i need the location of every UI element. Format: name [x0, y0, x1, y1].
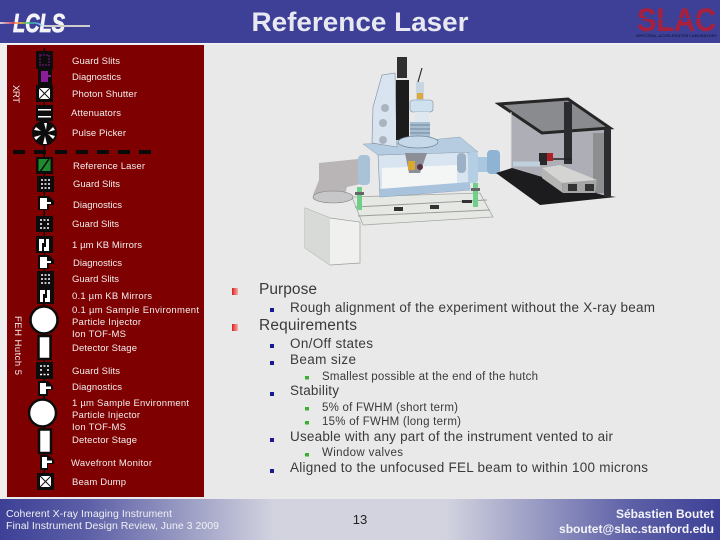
icon: beam dump — [37, 473, 54, 490]
base block — [305, 208, 360, 265]
beamline labels: Photon Shutter — [72, 89, 137, 100]
elbow pipe — [313, 155, 370, 203]
bullet list — [232, 281, 655, 475]
icon: wavefront monitor — [40, 455, 54, 470]
icon: guard slits — [36, 216, 53, 232]
curved support plate — [372, 73, 397, 147]
beamline labels: Guard Slits — [72, 56, 120, 67]
bullet: Requirements — [232, 324, 238, 331]
text: rough alignment: Rough alignment of the experiment without the X-ray beam — [290, 300, 655, 315]
text: beam size: Beam size — [290, 352, 356, 367]
text: Purpose: Purpose — [259, 281, 317, 298]
icon: attenuators — [36, 105, 53, 121]
beamline labels: 0.1 µm KB Mirrors — [72, 291, 152, 302]
beamline labels: Particle Injector — [72, 410, 140, 421]
right flange — [468, 150, 500, 183]
beamline labels: Particle Injector — [72, 317, 141, 328]
beamline labels: Attenuators — [71, 108, 121, 119]
beamline labels: Diagnostics — [72, 72, 121, 83]
laser box — [513, 153, 597, 193]
icon: KB mirrors — [37, 287, 54, 304]
enclosure floor — [496, 168, 616, 205]
chamber body — [363, 137, 478, 197]
title: Reference Laser — [252, 7, 469, 37]
beamline labels: Ion TOF-MS — [72, 422, 126, 433]
footer right text: Sébastien Boutet — [616, 507, 714, 521]
icon: detector stage — [39, 430, 51, 453]
bullet — [270, 392, 274, 396]
logo: LCLS: LCLS — [13, 8, 65, 38]
beamline labels: 1 µm KB Mirrors — [72, 240, 142, 251]
text: aligned: Aligned to the unfocused FEL beam to within 100 microns — [290, 460, 648, 475]
bullet — [270, 361, 274, 365]
footer left text: Coherent X-ray Imaging Instrument — [6, 508, 172, 520]
text: stability: Stability — [290, 383, 339, 398]
icon: sample environment — [29, 400, 56, 426]
enclosure — [499, 99, 610, 195]
enclosure front pillar — [604, 128, 611, 197]
icon: diagnostics — [38, 381, 53, 396]
icon: diagnostics — [38, 255, 54, 269]
icon: guard slits — [37, 176, 54, 192]
XRT label: XRT — [10, 85, 21, 103]
text: useable: Useable with any part of the instrument vented to air — [290, 429, 614, 444]
beamline labels: Beam Dump — [72, 477, 126, 488]
bullet — [305, 421, 309, 424]
beamline labels: Pulse Picker — [72, 128, 126, 139]
beamline labels: Detector Stage — [72, 435, 137, 446]
beamline labels: 0.1 µm Sample Environment — [72, 305, 199, 316]
rails — [352, 193, 493, 225]
icon: guard slits purple — [36, 51, 53, 69]
bullet — [305, 453, 309, 456]
beamline labels: Guard Slits — [72, 366, 120, 377]
XRT divider — [13, 150, 152, 154]
icon: detector stage — [38, 336, 50, 359]
bullet: Purpose — [232, 288, 238, 295]
beamline labels: Diagnostics — [73, 258, 122, 269]
beamline labels: Reference Laser — [73, 161, 145, 172]
beamline labels: Detector Stage — [72, 343, 137, 354]
beamline labels: Ion TOF-MS — [72, 329, 126, 340]
icon: KB mirrors — [36, 236, 53, 253]
icon: reference laser — [36, 157, 53, 174]
bullet — [270, 438, 274, 442]
logo: SLAC: SPECTRAL ACCELERATOR LABORATORY — [636, 33, 717, 38]
beamline labels: Guard Slits — [73, 179, 120, 190]
beamline labels — [71, 56, 199, 488]
vertical camera — [396, 57, 409, 140]
icon: pulse picker — [32, 120, 57, 146]
icon: photon shutter — [36, 85, 53, 102]
instrument illustration — [305, 57, 616, 265]
beamline labels: Diagnostics — [72, 382, 122, 393]
bullet — [270, 308, 274, 312]
bellows and sensor — [398, 68, 438, 148]
footer right text: sboutet@slac.stanford.edu — [559, 522, 714, 536]
icon: guard slits — [36, 362, 53, 379]
footer left text: Final Instrument Design Review, June 3 2009 — [6, 520, 219, 532]
header bar — [0, 0, 720, 44]
text: on/off states: On/Off states — [290, 336, 373, 351]
footer — [0, 499, 720, 540]
beamline labels: Guard Slits — [72, 219, 119, 230]
icon: diagnostics — [38, 196, 54, 210]
beamline labels: Wavefront Monitor — [71, 458, 152, 469]
beamline axis — [44, 48, 45, 488]
beamline labels: Guard Slits — [72, 274, 119, 285]
text: window valves: Window valves — [322, 447, 403, 459]
text: 15% of FWHM: 15% of FWHM (long term) — [322, 416, 461, 428]
bullet — [270, 469, 274, 473]
text: Requirements: Requirements — [259, 317, 357, 334]
FEH Hutch 5 label: FEH Hutch 5 — [12, 316, 23, 375]
panel: beamline — [0, 45, 204, 500]
footer left text — [6, 508, 219, 532]
bullet — [270, 344, 274, 348]
beamline labels: 1 µm Sample Environment — [72, 398, 189, 409]
text: 5% of FWHM: 5% of FWHM (short term) — [322, 402, 458, 414]
footer right text — [559, 507, 714, 536]
icon: diagnostics purple — [38, 69, 52, 85]
bullet — [305, 407, 309, 410]
bullet — [305, 376, 309, 380]
text: smallest possible: Smallest possible at the end of the hutch — [322, 371, 538, 383]
beamline labels: Diagnostics — [73, 200, 122, 211]
icon: sample environment — [30, 306, 58, 334]
green posts — [355, 183, 480, 210]
icon: guard slits — [37, 271, 54, 287]
page number: 13 — [353, 512, 367, 527]
